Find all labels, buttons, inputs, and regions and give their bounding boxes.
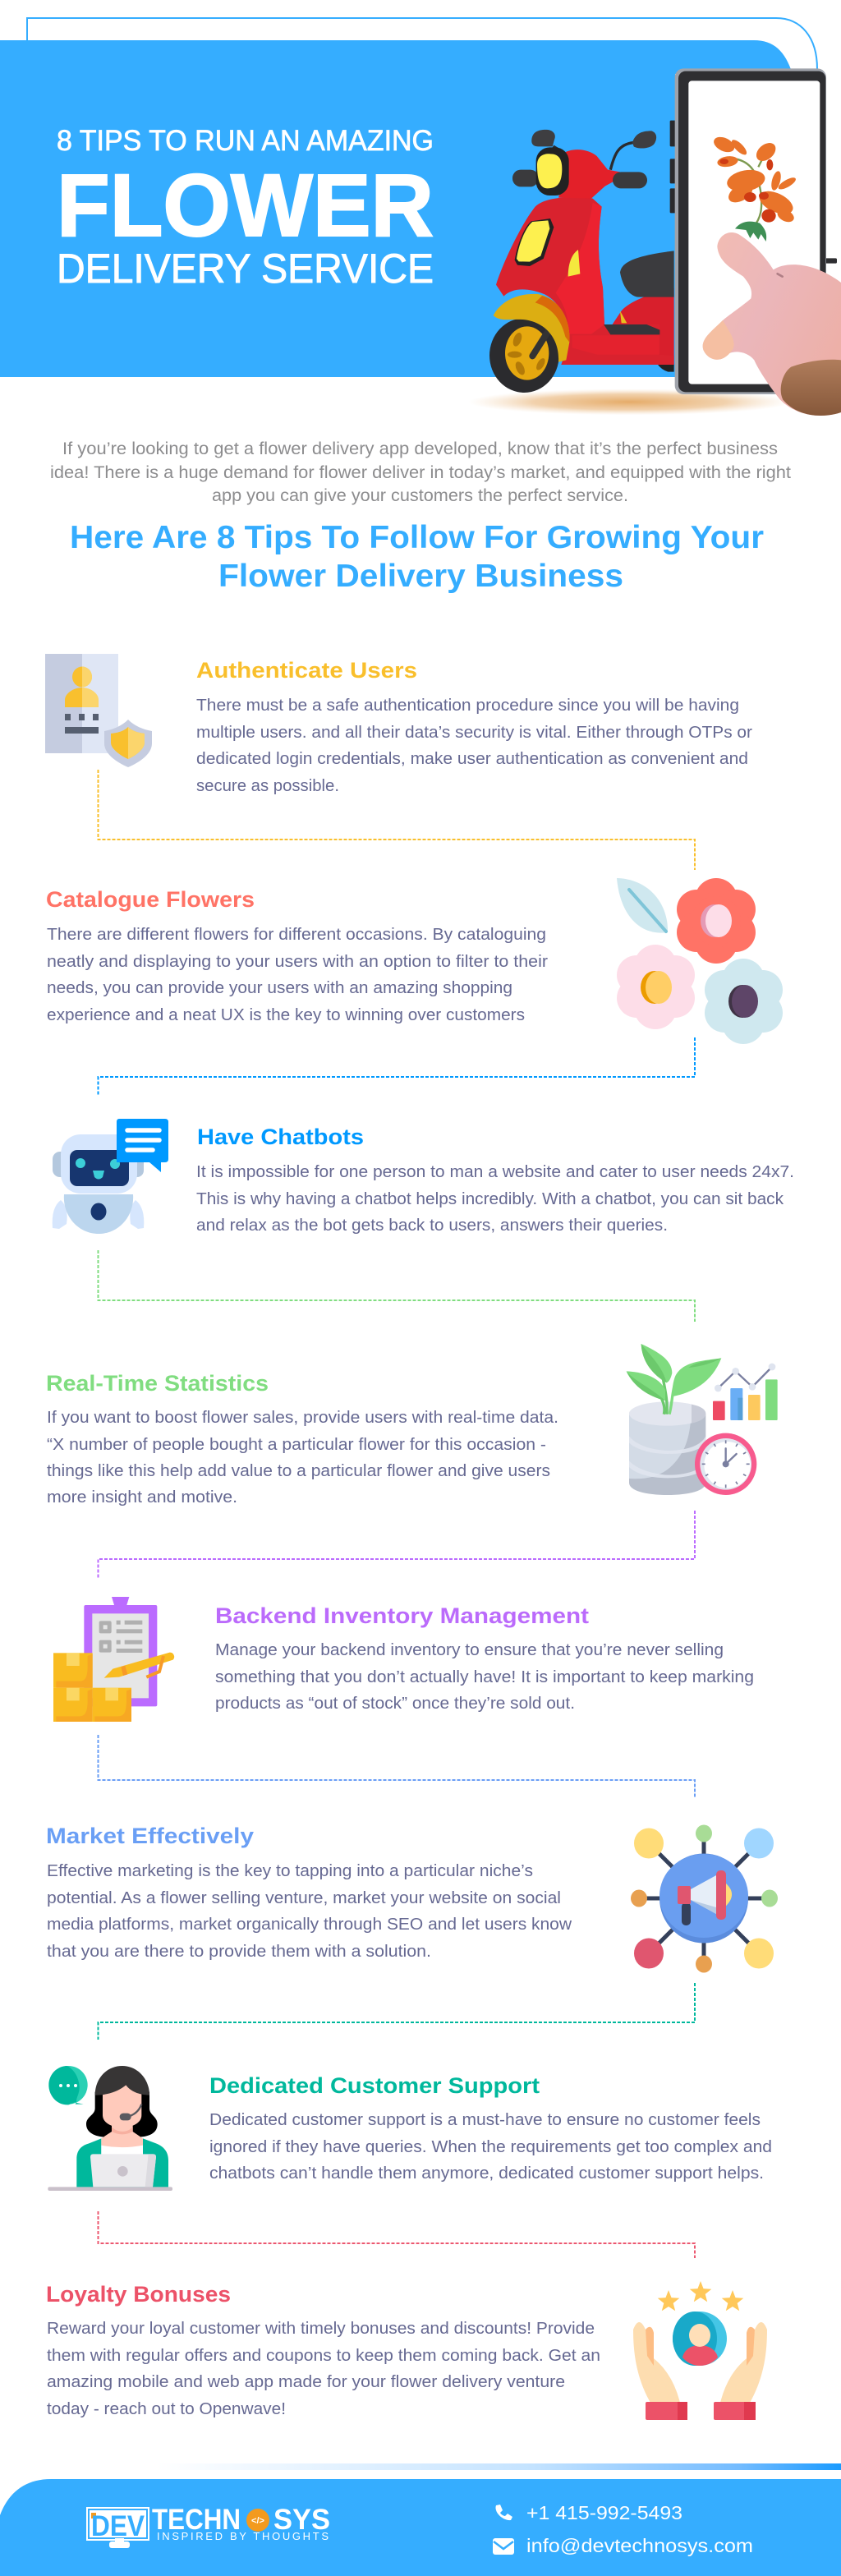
ground shadow (468, 389, 791, 415)
panel: have chatbots (53, 1119, 794, 1235)
body text: something that you don’t actually have! It is important to keep marking (215, 1668, 754, 1686)
scooter (489, 130, 674, 393)
logo: dev technosys: </> (251, 2516, 264, 2526)
main heading: Here Are 8 Tips To Follow For Growing Your (70, 520, 764, 555)
heading: Catalogue Flowers (46, 887, 255, 912)
intro paragraph (50, 439, 791, 505)
body text: products as “out of stock” once they’re sold out. (215, 1694, 575, 1713)
gold fender (494, 294, 569, 362)
connector 7 (99, 2211, 695, 2258)
heading: Backend Inventory Management (215, 1603, 589, 1628)
banner title: DELIVERY SERVICE (57, 246, 434, 292)
heading: Market Effectively (46, 1824, 254, 1848)
banner title: 8 TIPS TO RUN AN AMAZING (57, 125, 434, 157)
blue banner shape (0, 40, 793, 377)
connector 3 (99, 1250, 695, 1322)
body text: things like this help add value to a particular flower and give users (47, 1461, 550, 1480)
front wheel (489, 318, 559, 393)
body text: Dedicated customer support is a must-have to ensure no customer feels (209, 2110, 761, 2129)
body text: Effective marketing is the key to tapping into a particular niche’s (47, 1861, 533, 1880)
logo: dev technosys: DEV (91, 2510, 145, 2542)
connector 4 (99, 1511, 695, 1579)
body text (47, 1861, 572, 1961)
panel: loyalty bonuses (46, 2281, 767, 2420)
body text: There must be a safe authentication procedure since you will be having (196, 696, 739, 715)
contact: phone: +1 415-992-5493 (526, 2502, 682, 2523)
banner title: FLOWER (57, 155, 434, 255)
footer background (0, 2479, 841, 2576)
heading: Authenticate Users (196, 658, 417, 683)
hand (703, 232, 841, 416)
panel: market effectively (46, 1824, 778, 1973)
body text (196, 1162, 794, 1235)
body text: chatbots can’t handle them anymore, dedicated customer support helps. (209, 2164, 764, 2183)
header banner (0, 18, 841, 416)
body text: Reward your loyal customer with timely bonuses and discounts! Provide (47, 2319, 595, 2338)
body text: If you want to boost flower sales, provide users with real-time data. (47, 1408, 558, 1427)
body text (209, 2110, 772, 2183)
body text: dedicated login credentials, make user authentication as convenient and (196, 749, 748, 768)
body text (47, 925, 548, 1024)
body text: This is why having a chatbot helps incredibly. With a chatbot, you can sit back (196, 1189, 784, 1208)
connector 1 (99, 770, 695, 870)
panel: real-time statistics (46, 1344, 778, 1506)
body text: experience and a neat UX is the key to winning over customers (47, 1005, 525, 1024)
icon: database plant, chart and clock (627, 1344, 778, 1495)
body text: ignored if they have queries. When the requirements get too complex and (209, 2137, 772, 2156)
footer (0, 2479, 841, 2576)
body text: neatly and displaying to your users with an option to filter to their (47, 952, 548, 971)
body text: “X number of people bought a particular flower for this occasion - (47, 1435, 546, 1454)
main heading: Flower Delivery Business (218, 559, 623, 594)
illustration: scooter, phone and hand (468, 68, 841, 416)
panel: authenticate users (45, 654, 752, 795)
body text (196, 696, 752, 795)
headlight (536, 147, 569, 196)
heading: Loyalty Bonuses (46, 2282, 231, 2307)
panel: catalogue flowers (46, 878, 783, 1044)
icon: clipboard, boxes and pen (53, 1597, 174, 1722)
body text: today - reach out to Openwave! (47, 2399, 286, 2418)
panel: backend inventory management (53, 1597, 754, 1722)
body text: amazing mobile and web app made for your flower delivery venture (47, 2372, 565, 2391)
icon: robot with speech bubble (53, 1119, 168, 1234)
icon: megaphone network (631, 1825, 778, 1973)
panel: dedicated customer support (48, 2066, 772, 2191)
intro paragraph: If you’re looking to get a flower delivery app developed, know that it’s the perfect business (62, 439, 778, 458)
heading: Dedicated Customer Support (209, 2073, 540, 2098)
heading: Have Chatbots (197, 1125, 364, 1149)
connector 6 (99, 1983, 695, 2040)
body text: potential. As a flower selling venture, market your website on social (47, 1888, 561, 1907)
body text: needs, you can provide your users with an amazing shopping (47, 978, 512, 997)
body text: It is impossible for one person to man a website and cater to user needs 24x7. (196, 1162, 794, 1181)
icon: hands holding customer with stars (633, 2281, 767, 2420)
logo: dev technosys (87, 2504, 330, 2548)
body text (215, 1640, 754, 1713)
icon: support agent (48, 2066, 172, 2191)
thin outline above banner (27, 18, 817, 69)
body text (47, 2319, 600, 2418)
flower on phone screen (711, 134, 797, 242)
intro paragraph: app you can give your customers the perfect service. (212, 486, 628, 505)
logo: dev technosys: SYS (273, 2504, 330, 2536)
icon: id card with shield (45, 654, 152, 767)
handlebars and mirrors (512, 170, 539, 186)
icon: flowers and leaf (617, 878, 783, 1044)
banner title (57, 125, 434, 292)
connector 2 (99, 1037, 695, 1095)
body text (47, 1408, 558, 1506)
body text: multiple users. and all their data’s security is vital. Either through OTPs or (196, 723, 752, 742)
heading: Real-Time Statistics (46, 1371, 269, 1396)
phone (670, 68, 837, 394)
main heading (70, 520, 764, 594)
body text: There are different flowers for different occasions. By cataloguing (47, 925, 546, 944)
body text: that you are there to provide them with a solution. (47, 1942, 431, 1961)
body text: Manage your backend inventory to ensure that you’re never selling (215, 1640, 724, 1659)
logo: dev technosys: TECHN (152, 2504, 241, 2536)
body text: media platforms, market organically through SEO and let users know (47, 1915, 572, 1934)
intro paragraph: idea! There is a huge demand for flower deliver in today’s market, and equipped with the right (50, 463, 791, 482)
contact: email: info@devtechnosys.com (526, 2535, 753, 2556)
body text: more insight and motive. (47, 1488, 237, 1506)
body text: and relax as the bot gets back to users, answers their queries. (196, 1216, 668, 1235)
body text: them with regular offers and coupons to keep them coming back. Get an (47, 2346, 600, 2365)
logo: dev technosys: INSPIRED BY THOUGHTS (157, 2530, 329, 2542)
connector 5 (99, 1735, 695, 1797)
gradient divider bar (156, 2463, 841, 2470)
body text: secure as possible. (196, 776, 339, 795)
